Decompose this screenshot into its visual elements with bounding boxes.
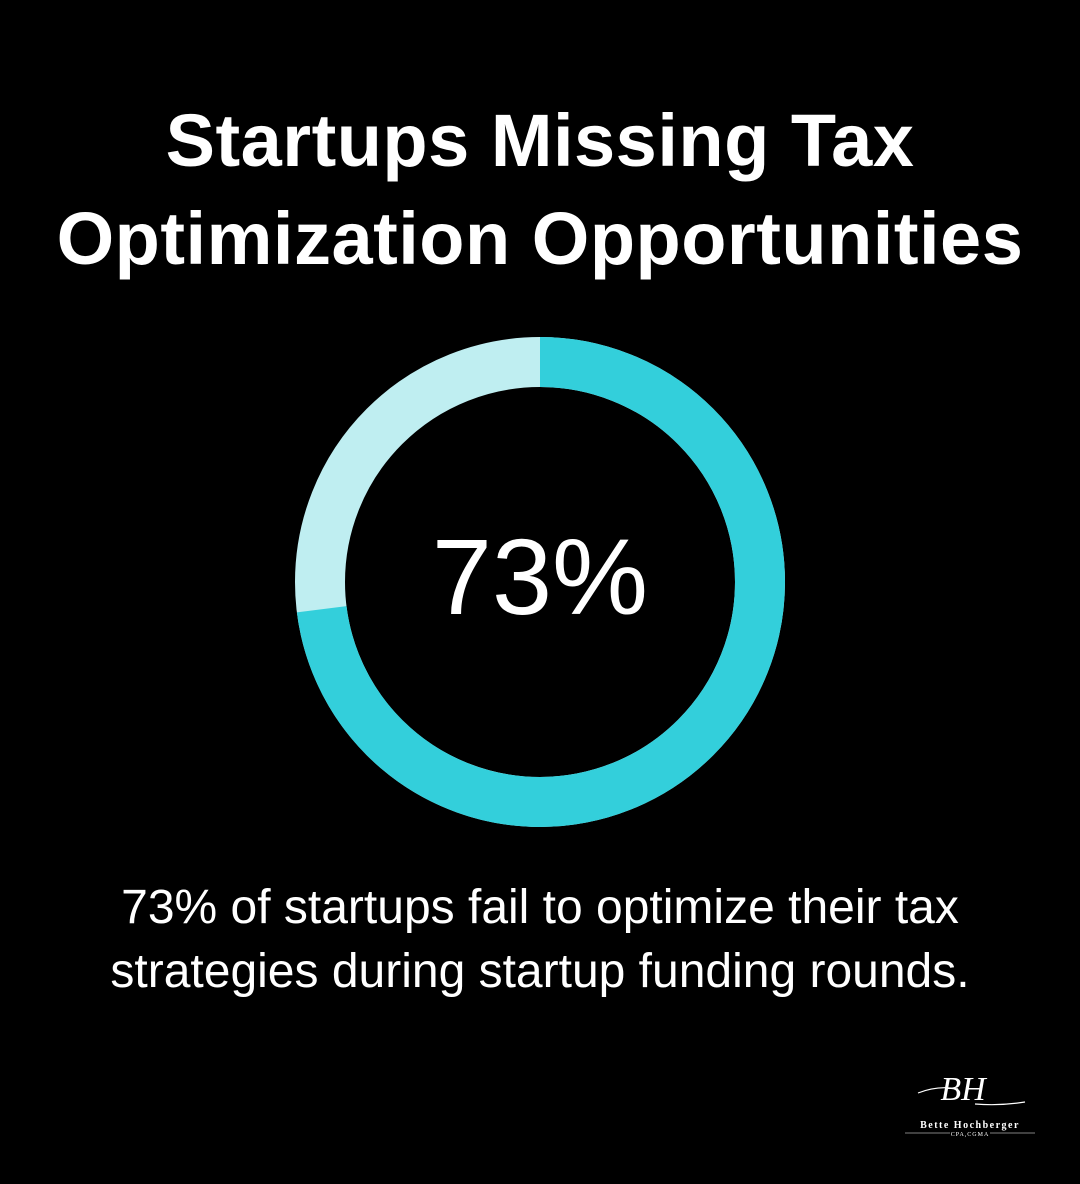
- logo: BH: [940, 1071, 988, 1108]
- title: Startups Missing Tax: [166, 99, 914, 182]
- logo: [905, 1071, 1035, 1138]
- title: [57, 99, 1023, 280]
- caption: [110, 881, 970, 998]
- logo: Bette Hochberger: [920, 1120, 1020, 1131]
- logo: CPA,CGMA: [951, 1132, 989, 1138]
- caption: strategies during startup funding rounds.: [110, 945, 970, 998]
- caption: 73% of startups fail to optimize their tax: [121, 881, 959, 934]
- light segment: [320, 362, 760, 802]
- center value: 73%: [432, 516, 648, 637]
- teal segment 73%: [320, 362, 760, 802]
- title: Optimization Opportunities: [57, 197, 1023, 280]
